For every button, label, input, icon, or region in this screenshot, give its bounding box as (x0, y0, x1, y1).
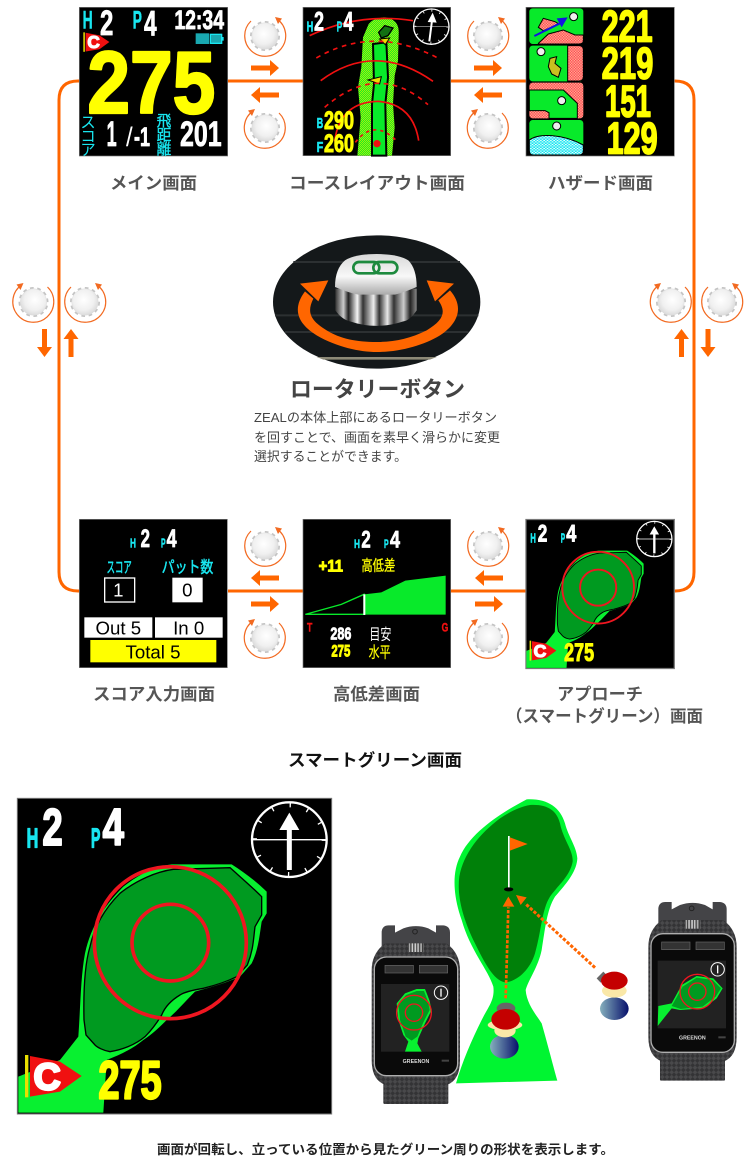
screen: score entry: P (161, 536, 166, 551)
screen: score entry: 0 (182, 580, 193, 601)
screen: main: -1 (134, 122, 150, 152)
screen: approach large: 275 (98, 1051, 162, 1110)
screen: elevation: 水平 (369, 645, 391, 662)
rotary icons and arrows: top right (467, 17, 509, 148)
label: approach screen (506, 685, 703, 726)
label: course layout screen: コースレイアウト画面 (289, 174, 465, 193)
watch: right: GREENON (679, 1035, 706, 1041)
screen: elevation: T (307, 621, 313, 635)
photo: rotary button (273, 235, 480, 369)
label: hazard screen: ハザード画面 (548, 174, 653, 193)
dotted arrow: front player (503, 897, 514, 998)
screen: score entry: パット数 (162, 559, 213, 577)
rotary description: を回すことで、画面を素早く滑らかに変更 (254, 430, 500, 445)
screen: elevation: H (354, 537, 360, 551)
screen: hazard: 221 (602, 3, 653, 52)
heading: smart green screen: スマートグリーン画面 (288, 750, 462, 770)
screen: main: 離 (157, 141, 172, 158)
screen: approach large: H (27, 822, 38, 853)
screen: course layout: 290 (324, 108, 354, 135)
rotation arrow (298, 280, 458, 352)
label: approach screen: アプローチ (557, 685, 643, 704)
rotary icons and arrows: bottom left (244, 527, 286, 658)
screen: elevation: 275 (331, 642, 350, 661)
label: elevation screen: 高低差画面 (333, 684, 420, 704)
screen: score entry: 1 (113, 580, 124, 601)
screen: approach small: 2 (538, 521, 547, 548)
player: front (488, 1003, 522, 1059)
screen: elevation: G (442, 621, 448, 635)
screen: elevation: 高低差 (361, 557, 395, 574)
rotary icons and arrows: bottom right (467, 527, 509, 658)
screen: main: 4 (144, 5, 157, 44)
heading: rotary button: ロータリーボタン (290, 377, 465, 402)
screen: score entry: 4 (167, 526, 177, 553)
hazard panel 4 (529, 120, 583, 155)
screen: score entry: 2 (141, 526, 150, 553)
screen: main: 275 (87, 33, 215, 132)
rotary icons and arrows: right side (650, 283, 743, 357)
screen: course layout: B (317, 116, 323, 132)
screen: elevation: 目安 (369, 626, 391, 643)
screen: main: C (87, 32, 100, 52)
rotary description: ZEALの本体上部にあるロータリーボタン (254, 410, 497, 425)
screen: main: P (133, 7, 142, 34)
screen: approach large (17, 798, 332, 1114)
rotary icons and arrows: top left (244, 17, 286, 148)
watch: left: GREENON (403, 1059, 429, 1065)
screen: course layout: 4 (343, 7, 353, 37)
screen: main: 201 (180, 115, 222, 154)
screen: approach large: 2 (42, 798, 63, 856)
screen: main: / (126, 122, 133, 152)
flag and hole (504, 836, 528, 891)
label: approach screen: （スマートグリーン）画面 (506, 706, 703, 726)
fairway (357, 17, 399, 156)
screen: elevation: P (384, 537, 389, 551)
screen: elevation (303, 519, 451, 668)
screen: hazard: 151 (605, 77, 651, 126)
rotary description: 選択することができます。 (254, 449, 407, 464)
label: score entry screen: スコア入力画面 (93, 685, 215, 704)
screen: main: 2 (100, 4, 113, 43)
hazard panel 2 (529, 46, 583, 81)
screen: approach small: H (530, 531, 536, 546)
screen: main: ア (80, 142, 96, 159)
green shape (455, 799, 577, 1083)
screen: approach large: 4 (103, 798, 124, 856)
watch: right (648, 902, 737, 1081)
screen: main: 距 (157, 127, 172, 144)
screen: course layout (303, 7, 451, 158)
screen: score entry: In 0 (173, 617, 204, 638)
knob body (335, 254, 417, 326)
screen: elevation: 286 (330, 624, 352, 644)
screen: approach small: 275 (564, 639, 594, 667)
illustration: green and players (372, 799, 737, 1104)
caption: 画面が回転し、立っている位置から見たグリーン周りの形状を表示します。 (157, 1142, 614, 1157)
elevation profile (305, 576, 446, 615)
screen: hazard: 129 (607, 114, 658, 163)
screen: approach small (526, 520, 674, 668)
compass (414, 9, 449, 44)
screen: approach large: P (91, 822, 100, 853)
label: main screen: メイン画面 (110, 174, 197, 193)
rotary icons and arrows: left side (13, 283, 106, 357)
screen: main (79, 4, 228, 159)
screen: course layout: 2 (314, 7, 324, 37)
player: side (597, 972, 629, 1020)
screen: score entry: H (130, 536, 136, 551)
hazard panel 1 (529, 8, 583, 44)
screen: course layout: H (307, 19, 313, 35)
screen: score entry (79, 519, 227, 668)
screen: approach small: P (561, 531, 565, 546)
screen: score entry: Out 5 (96, 617, 141, 638)
screen: score entry: Total 5 (126, 641, 180, 662)
watch: left (372, 925, 460, 1104)
dotted arrow: side player (516, 895, 595, 968)
screen: score entry: スコア (107, 560, 132, 577)
screen: approach large: C (34, 1055, 61, 1097)
screen: approach small: C (534, 641, 547, 661)
connector loop lines (59, 81, 694, 591)
screen: main: 12:34 (174, 5, 224, 35)
rotary description (254, 410, 500, 464)
screen: elevation: 2 (361, 527, 371, 554)
screen: elevation: +11 (319, 556, 343, 575)
distance arcs (310, 18, 440, 142)
screen: course layout: P (337, 19, 342, 35)
hazard panel 3 (529, 83, 583, 118)
screen: main: 飛 (157, 113, 172, 130)
screen: main: 1 (107, 115, 117, 154)
screen: main: コ (80, 129, 96, 146)
screen: course layout: F (317, 140, 323, 156)
screen: hazard: 219 (602, 40, 653, 89)
screen: hazard (526, 3, 674, 163)
screen: main: H (83, 7, 93, 34)
screen: approach small: 4 (566, 521, 577, 548)
screen: main: ス (80, 115, 96, 132)
screen: elevation: 4 (390, 527, 400, 554)
screen: course layout: 260 (324, 131, 354, 158)
